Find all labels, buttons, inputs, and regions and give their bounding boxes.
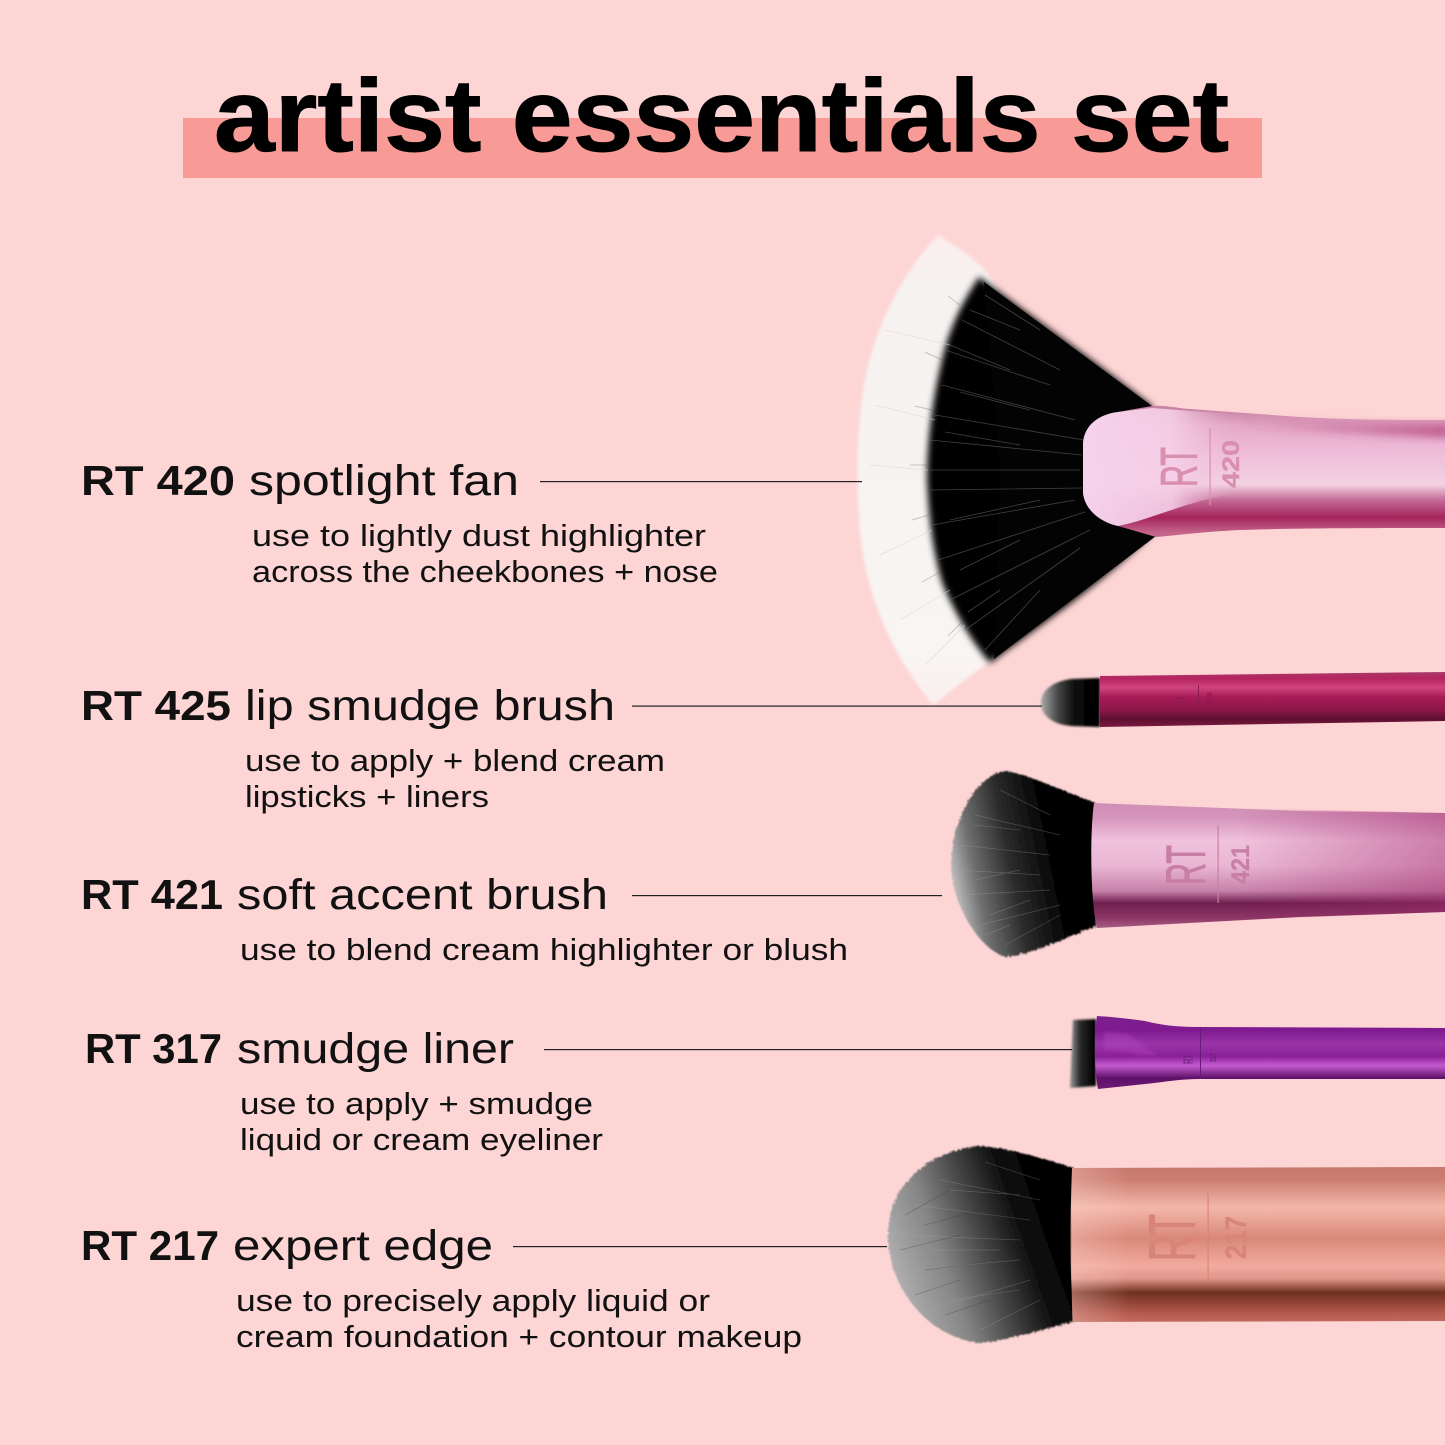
accent brush markings: 421 — [1227, 845, 1255, 884]
edge brush markings: RT — [1135, 1214, 1209, 1261]
callout: RT 420: RT 420 — [81, 457, 235, 504]
edge brush bristles — [888, 1146, 1075, 1343]
callout: RT 421 — [81, 871, 942, 967]
callout: RT 420: spotlight fan — [249, 457, 519, 505]
brush: RT 425 lip smudge — [1041, 672, 1445, 727]
callout: RT 420: use to lightly dust highlighter — [252, 518, 706, 553]
fan handle — [1083, 406, 1445, 537]
liner neck highlights — [1104, 1032, 1158, 1055]
callout: RT 217: expert edge — [233, 1222, 493, 1270]
callout: RT 425: lip smudge brush — [245, 682, 615, 730]
title banner — [183, 58, 1262, 178]
callout: RT 317: RT 317 — [85, 1025, 222, 1072]
title: artist essentials set — [214, 58, 1229, 173]
callout: RT 425: RT 425 — [81, 682, 231, 729]
callout: RT 425: lipsticks + liners — [245, 779, 489, 814]
callout: RT 421: soft accent brush — [237, 871, 608, 919]
accent brush handle — [1091, 803, 1445, 928]
callout: RT 217: cream foundation + contour makeup — [236, 1319, 802, 1354]
lip brush markings: 425 — [1207, 692, 1214, 708]
brush: RT 420 spotlight fan — [857, 235, 1445, 705]
lip brush handle — [1100, 672, 1445, 727]
brush: RT 317 smudge liner — [1070, 1016, 1445, 1089]
callout: RT 421: RT 421 — [81, 871, 223, 918]
callout: RT 317: use to apply + smudge — [240, 1086, 593, 1121]
liner brush bristles — [1070, 1019, 1096, 1088]
accent brush markings — [1154, 825, 1255, 903]
edge brush markings — [1135, 1193, 1253, 1282]
accent brush bristles — [951, 771, 1096, 957]
lip brush markings: RT — [1172, 695, 1188, 708]
liner brush markings: 317 — [1209, 1053, 1218, 1062]
fan handle markings — [1151, 428, 1245, 505]
edge brush markings: 217 — [1220, 1216, 1253, 1259]
brush: RT 217 expert edge — [888, 1146, 1445, 1343]
fan handle markings: RT — [1151, 447, 1209, 487]
liner brush markings — [1180, 1027, 1218, 1079]
callout: RT 420 — [81, 457, 862, 589]
fan strand highlights — [930, 295, 1090, 650]
callout: RT 317: smudge liner — [237, 1025, 514, 1073]
callout: RT 421: use to blend cream highlighter or blush — [240, 932, 848, 967]
lip brush bristles — [1041, 678, 1100, 727]
lip brush markings — [1172, 685, 1214, 710]
liner brush markings: RT — [1180, 1054, 1196, 1064]
fan handle markings: 420 — [1218, 440, 1245, 488]
callout: RT 217: use to precisely apply liquid or — [236, 1283, 710, 1318]
fan black bristles — [927, 277, 1152, 663]
callout: RT 317 — [85, 1025, 1072, 1157]
callout: RT 420: across the cheekbones + nose — [252, 554, 718, 589]
callout: RT 425: use to apply + blend cream — [245, 743, 665, 778]
callout: RT 317: liquid or cream eyeliner — [240, 1122, 603, 1157]
callout: RT 217 — [81, 1222, 887, 1354]
fan bristle feathering — [910, 296, 962, 636]
edge brush handle — [1071, 1167, 1445, 1322]
fan white tips — [857, 235, 1010, 705]
accent brush markings: RT — [1154, 845, 1217, 885]
liner brush handle — [1095, 1016, 1445, 1089]
brush: RT 421 soft accent — [951, 771, 1445, 957]
callout: RT 217: RT 217 — [81, 1222, 219, 1269]
callout: RT 425 — [81, 682, 1042, 814]
